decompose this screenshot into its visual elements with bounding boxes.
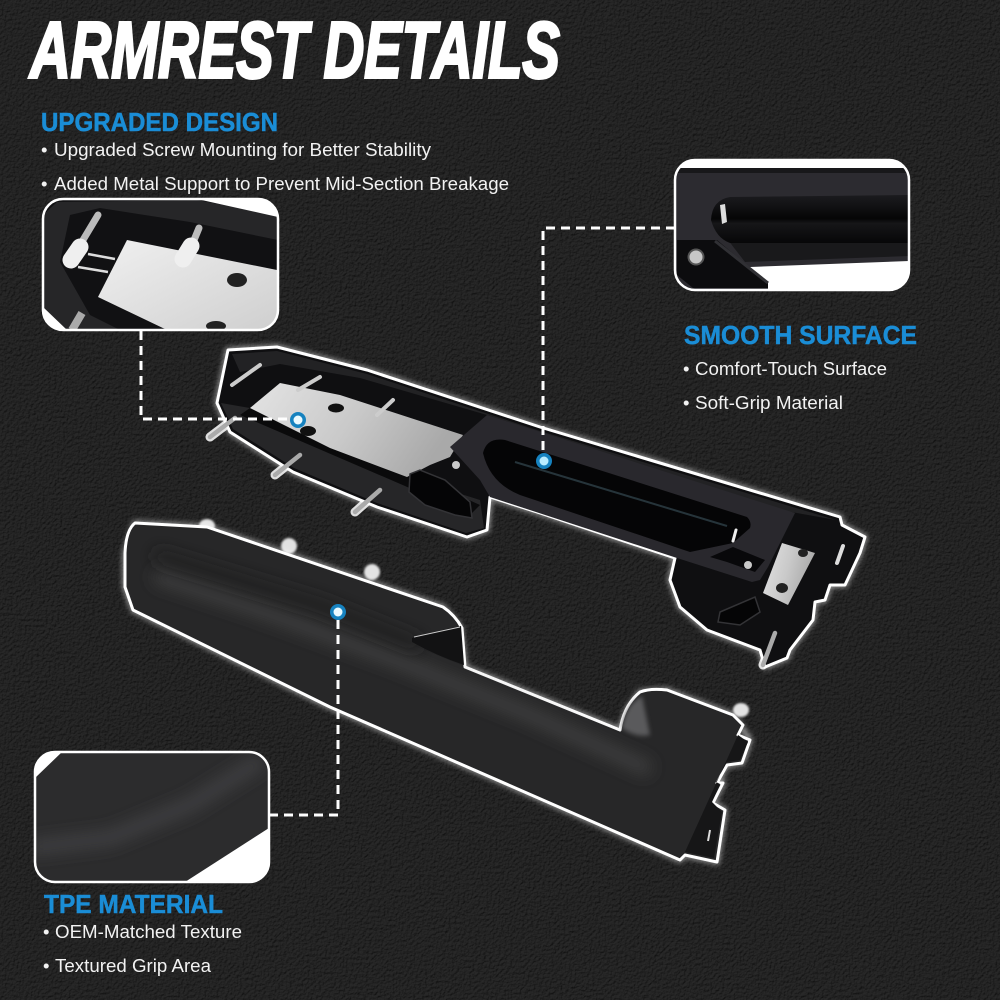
hand recess (412, 626, 464, 665)
heading: TPE material: TPE MATERIAL (44, 889, 223, 919)
glossy tube (711, 195, 909, 243)
cover upper shadow (155, 555, 420, 645)
lower rim of tray (221, 403, 484, 533)
tube lower tray (730, 243, 908, 262)
bullet: soft-grip: • (683, 392, 689, 413)
small left screw (452, 461, 460, 469)
marker dot: smooth surface (536, 453, 552, 469)
pin 2 (192, 228, 199, 245)
white corner (750, 261, 909, 290)
lid screw (744, 561, 752, 569)
dashed leader: smooth surface (543, 228, 675, 455)
panel: TPE material text (43, 889, 242, 976)
top right white corner (202, 200, 277, 217)
panel: upgraded design text (41, 107, 509, 194)
end tab slot (708, 830, 710, 841)
recess edge (414, 627, 460, 637)
heading: upgraded design: UPGRADED DESIGN (41, 107, 278, 137)
tube highlight (720, 204, 727, 224)
channel highlight (733, 530, 736, 541)
mounting bracket (409, 470, 472, 518)
end highlight (837, 546, 843, 563)
bullet: metal support: Added Metal Support to Prevent Mid-Section Breakage (54, 173, 509, 194)
bullet: soft-grip: Soft-Grip Material (695, 392, 843, 413)
top dark line (675, 168, 909, 173)
support bars (78, 254, 115, 272)
white strip (680, 161, 904, 168)
white bottom right (185, 828, 269, 882)
panel: smooth surface text (683, 320, 917, 413)
screw (688, 250, 704, 264)
lower tray strip (765, 256, 908, 262)
pin 1 (80, 215, 98, 245)
glossy channel (483, 440, 751, 552)
bottom left white corner (44, 308, 66, 329)
bullet: comfort-touch: • (683, 358, 689, 379)
callout: smooth surface close-up (675, 160, 909, 290)
plate (98, 240, 278, 330)
title: ARMREST DETAILS (28, 5, 560, 95)
dashed leader: upgraded design (141, 331, 292, 419)
pin 3 (72, 313, 82, 330)
dashed leader: TPE material (269, 618, 338, 815)
callout: metal support close-up (43, 199, 278, 331)
inner pins (232, 365, 393, 415)
bullet: OEM texture: • (43, 921, 49, 942)
right recess scoop (622, 696, 650, 736)
bullet: OEM texture: OEM-Matched Texture (55, 921, 242, 942)
marker dot: TPE material (330, 604, 346, 620)
lid over channel (450, 415, 795, 582)
cover pin nubs (199, 519, 749, 717)
end clip tabs (685, 735, 748, 858)
plate holes (328, 404, 344, 412)
marker dot: upgraded design (290, 412, 306, 428)
outer pin halos (210, 418, 775, 665)
channel reflection line (515, 462, 727, 526)
metal support plate (250, 383, 463, 477)
bullet: comfort-touch: Comfort-Touch Surface (695, 358, 887, 379)
top bar (43, 200, 278, 330)
highlight band (30, 760, 262, 848)
cover grain highlight (155, 575, 650, 770)
upper armrest: open inner view (210, 347, 865, 667)
lower armrest: textured cover (125, 519, 750, 862)
bullet: screw mounting: • (41, 139, 47, 160)
lid window (710, 547, 765, 572)
heading: smooth surface: SMOOTH SURFACE (684, 320, 917, 350)
bullet: textured grip: • (43, 955, 49, 976)
plate holes (227, 273, 247, 287)
end metal plate (763, 543, 815, 605)
bullet: metal support: • (41, 173, 47, 194)
outer pins (210, 418, 775, 665)
bullet: screw mounting: Upgraded Screw Mounting for Better Stability (54, 139, 432, 160)
lower lid (677, 240, 768, 288)
callout: TPE texture close-up (30, 752, 269, 882)
end bracket (718, 597, 760, 625)
top rim of tray (232, 351, 836, 520)
bullet: textured grip: Textured Grip Area (55, 955, 212, 976)
white top left (36, 753, 61, 777)
